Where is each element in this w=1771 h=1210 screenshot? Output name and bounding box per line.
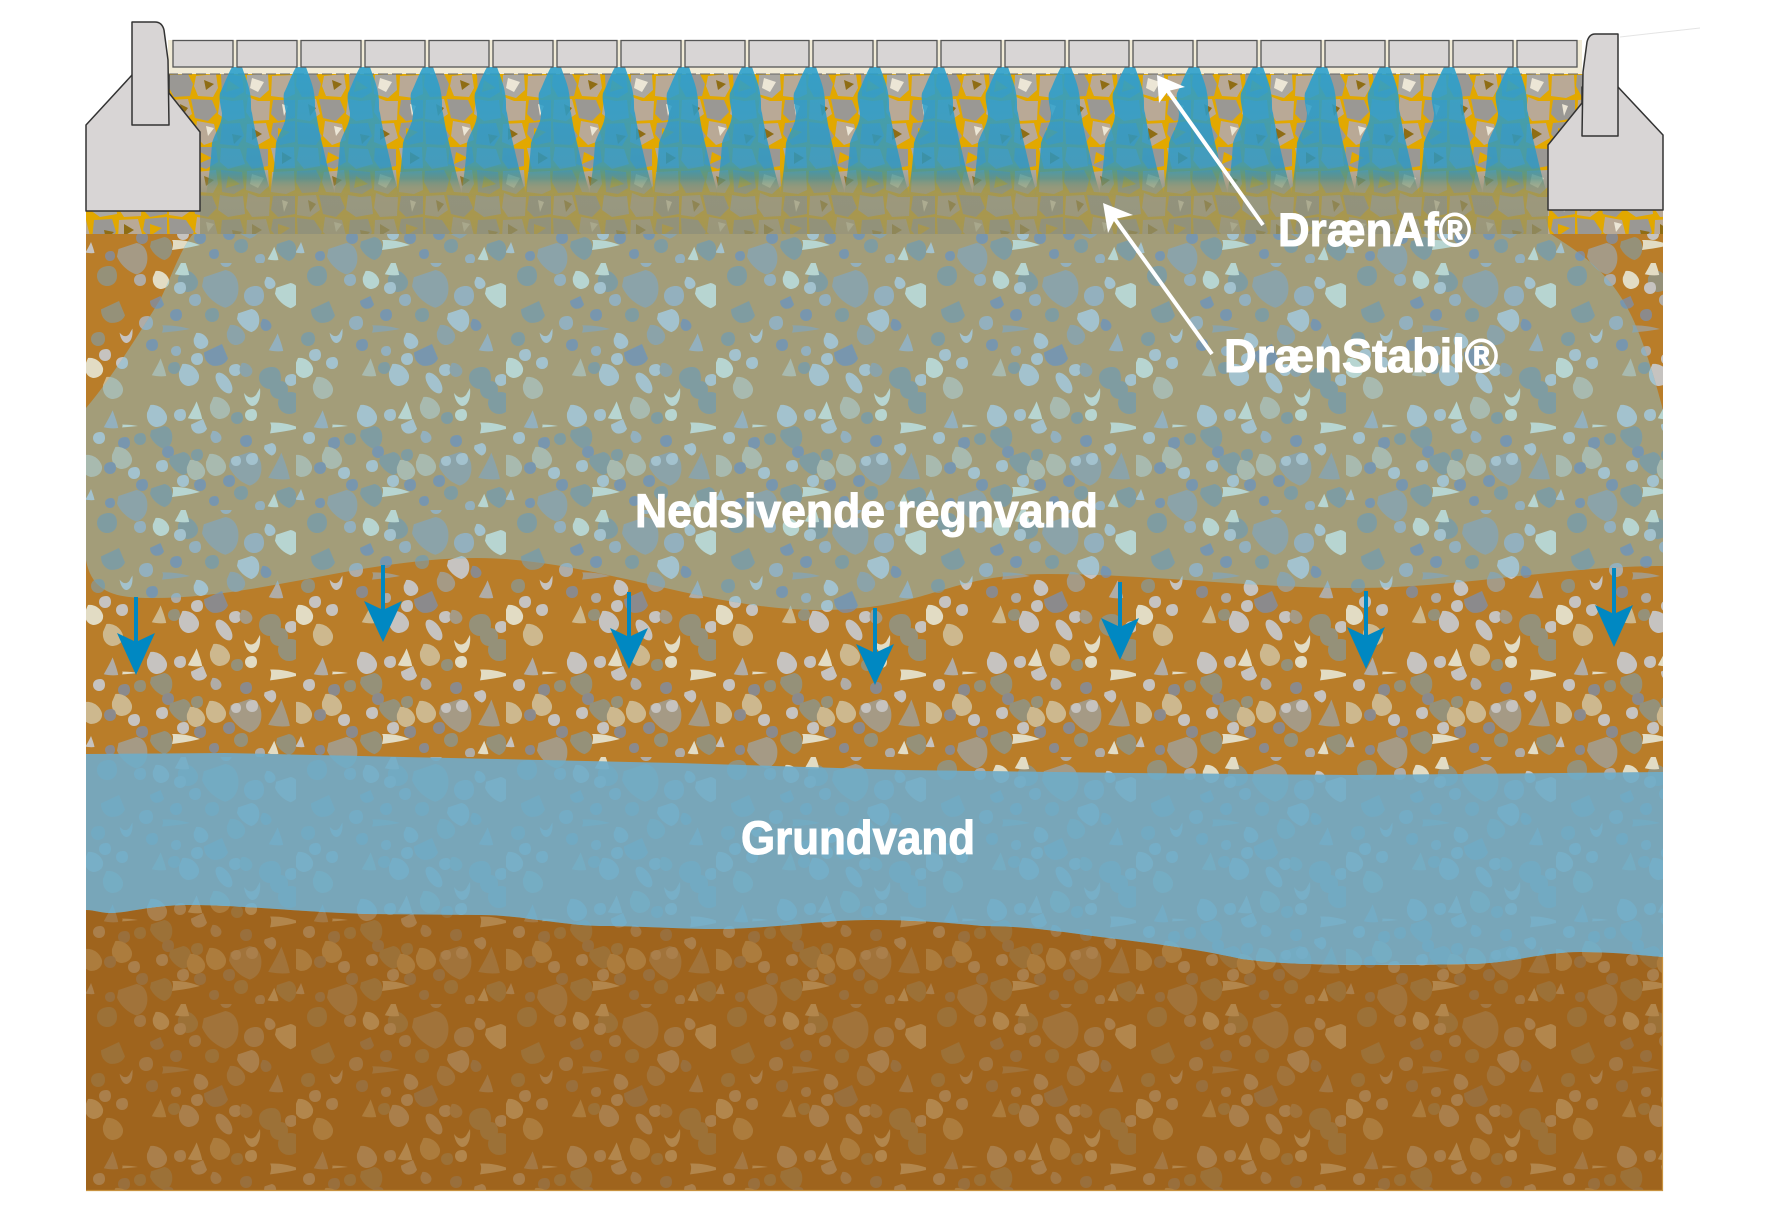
label: Grundvand: Grundvand — [741, 811, 975, 864]
arrow 7 — [1595, 568, 1633, 647]
arrow 1 — [117, 597, 155, 675]
label: Nedsivende regnvand: Nedsivende regnvand — [635, 484, 1098, 537]
left kerb and foundation — [86, 22, 200, 211]
panel: water cones in gravel — [205, 67, 1546, 200]
panel: paving tiles — [173, 40, 1577, 67]
arrow: DrænAf pointer — [1157, 75, 1263, 225]
arrow 5 — [1101, 582, 1139, 660]
panel: bedding sand — [168, 40, 1582, 74]
label: DrænStabil: DrænStabil® — [1224, 329, 1498, 382]
panel: middle soil layer — [86, 234, 1663, 964]
panel: DrænStabil olive tint band — [200, 170, 1548, 234]
panel: DrænAf gravel layer — [86, 74, 1663, 234]
panel: groundwater band — [86, 753, 1663, 965]
panel: seeping rainwater zone — [86, 234, 1663, 610]
panel: deep soil layer — [86, 905, 1663, 1191]
arrow 6 — [1347, 591, 1385, 669]
label: DrænAf: DrænAf® — [1278, 203, 1471, 256]
arrow 2 — [364, 565, 402, 642]
arrow 3 — [610, 592, 648, 669]
arrow: DrænStabil pointer — [1103, 203, 1212, 354]
seepage arrows — [117, 565, 1633, 685]
arrow 4 — [856, 608, 894, 685]
right kerb and foundation — [1548, 34, 1663, 210]
